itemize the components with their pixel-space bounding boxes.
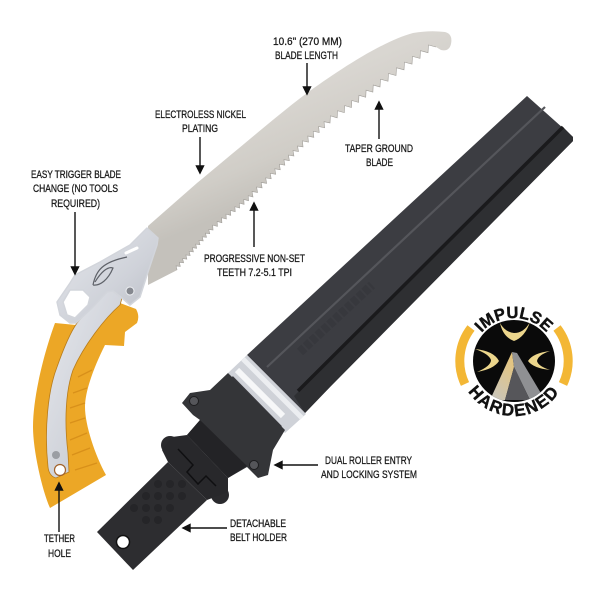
arrow — [304, 63, 310, 94]
roller rivet bottom — [250, 460, 258, 470]
arrow — [196, 137, 204, 173]
label: electroless nickel plating: PLATING — [182, 123, 218, 135]
chrome collar — [228, 355, 306, 433]
crescents — [475, 322, 550, 372]
label: dual roller entry: AND LOCKING SYSTEM — [321, 469, 417, 481]
label: taper ground blade: BLADE — [366, 157, 393, 169]
blade teeth shading — [176, 45, 436, 270]
badge circle — [473, 320, 555, 402]
right gold arc — [557, 328, 568, 384]
grip dots — [130, 480, 186, 524]
left gold arc — [460, 328, 471, 384]
metal blade mount with trigger — [57, 228, 158, 323]
impulse hardened badge — [455, 306, 573, 416]
blade release slot — [126, 248, 137, 253]
label: easy trigger blade change — [31, 169, 121, 274]
arrow — [56, 483, 62, 532]
label: dual roller entry — [275, 455, 417, 481]
sheath throat with dual rollers — [182, 373, 285, 478]
black sheath — [247, 96, 573, 413]
label: blade length — [273, 36, 342, 94]
mountain emblem — [492, 352, 540, 400]
label: dual roller entry: DUAL ROLLER ENTRY — [325, 455, 412, 467]
label: electroless nickel plating: ELECTROLESS NICKEL — [155, 109, 246, 121]
label: easy trigger blade change: REQUIRED) — [51, 198, 100, 210]
sheath embossed mark — [300, 285, 372, 352]
tang rivet — [52, 451, 60, 459]
sheath lower panel — [294, 127, 573, 413]
label: detachable belt holder: DETACHABLE — [230, 518, 286, 530]
badge text bottom: HARDENED — [468, 384, 557, 416]
hinge section — [162, 435, 228, 500]
label: easy trigger blade change: EASY TRIGGER BLADE — [31, 169, 121, 181]
grip ridges — [70, 370, 97, 470]
label: blade length: BLADE LENGTH — [275, 50, 338, 62]
sheath ridge — [267, 107, 545, 367]
orange handle — [33, 291, 138, 508]
hinge cutout — [178, 449, 216, 486]
holder plate — [97, 462, 207, 570]
label: progressive teeth — [204, 203, 305, 279]
right ear — [211, 486, 229, 504]
label: taper ground blade — [345, 102, 413, 169]
pivot screw — [126, 287, 134, 295]
label: tether hole — [44, 483, 75, 560]
label: detachable belt holder — [183, 518, 287, 544]
belt holder — [97, 435, 229, 570]
arrow — [376, 102, 382, 139]
label: progressive teeth: TEETH 7.2-5.1 TPI — [217, 267, 292, 279]
label: detachable belt holder: BELT HOLDER — [230, 532, 287, 544]
tether hole — [54, 464, 66, 476]
label: tether hole: HOLE — [48, 548, 71, 560]
arrow — [183, 524, 227, 532]
badge text top: IMPULSE — [474, 306, 554, 332]
belt holder hole — [116, 536, 130, 548]
trigger wire — [93, 257, 127, 285]
label: blade length: 10.6" (270 MM) — [273, 36, 342, 48]
sheath groove — [298, 127, 563, 391]
arrow — [250, 203, 258, 247]
arrow — [72, 212, 78, 274]
label: electroless nickel plating — [155, 109, 246, 173]
saw blade — [148, 31, 451, 285]
label: taper ground blade: TAPER GROUND — [345, 143, 413, 155]
arrow — [275, 462, 318, 468]
metal tang — [46, 291, 122, 478]
label: easy trigger blade change: CHANGE (NO TOOLS — [33, 183, 118, 195]
roller rivet top — [190, 396, 198, 406]
left ear — [161, 436, 179, 454]
label: tether hole: TETHER — [44, 533, 75, 545]
locking band — [187, 420, 247, 478]
label: progressive teeth: PROGRESSIVE NON-SET — [204, 253, 305, 265]
